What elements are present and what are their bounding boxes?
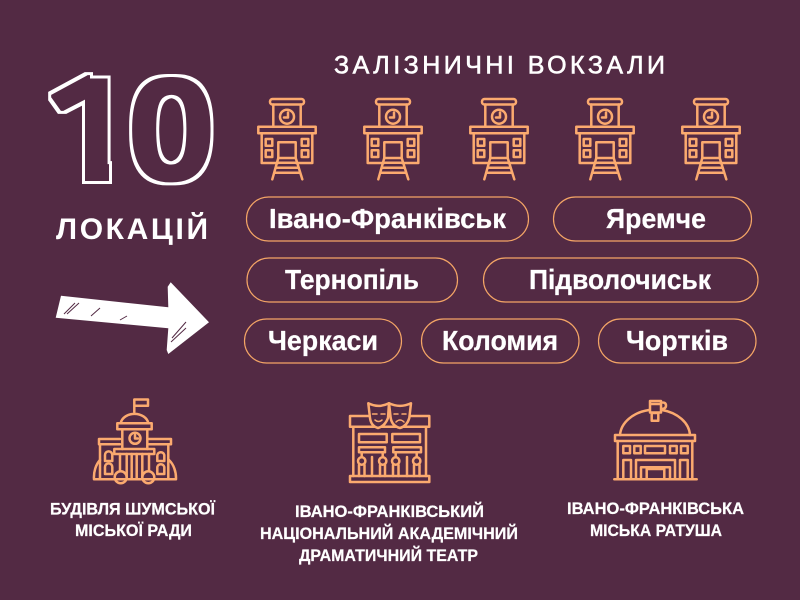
hand-drawn arrow <box>56 282 209 354</box>
big number 10 <box>48 72 214 186</box>
pill: Chortkiv <box>598 319 756 363</box>
icon: railway station 4 <box>576 99 634 179</box>
pill: Ivano-Frankivsk: Івано-Франківськ <box>269 203 507 234</box>
big number 10: 0 <box>127 48 216 211</box>
caption: drama theatre: ІВАНО-ФРАНКІВСЬКИЙ <box>295 502 484 521</box>
pill: Ternopil <box>247 258 458 302</box>
pill: Yaremche <box>554 197 752 241</box>
pill: Kolomyia: Коломия <box>442 325 558 356</box>
caption: city council: БУДІВЛЯ ШУМСЬКОЇ <box>50 500 216 518</box>
title: railway stations: ЗАЛІЗНИЧНІ ВОКЗАЛИ <box>334 52 665 80</box>
icon: railway station 1 <box>258 99 316 179</box>
pill: Cherkasy: Черкаси <box>268 325 378 356</box>
pill: Kolomyia <box>422 319 579 363</box>
label: locations count: ЛОКАЦІЙ <box>56 212 208 246</box>
caption: city hall: ІВАНО-ФРАНКІВСЬКА <box>567 499 744 518</box>
pill: Cherkasy <box>244 319 402 363</box>
icon: city council building <box>94 400 176 483</box>
pill: Yaremche: Яремче <box>606 203 706 234</box>
icon: railway station 2 <box>364 99 422 179</box>
pill: Pidvolochysk <box>484 258 758 302</box>
pill: Chortkiv: Чортків <box>626 325 728 356</box>
big number 10: 1 <box>47 48 136 211</box>
caption: drama theatre <box>260 502 518 565</box>
icon: drama theatre <box>350 403 429 482</box>
caption: city council: МІСЬКОЇ РАДИ <box>75 521 192 540</box>
pill: Pidvolochysk: Підволочиськ <box>529 264 712 295</box>
icon: railway station 5 <box>682 99 740 179</box>
icon: city hall <box>614 401 697 479</box>
pill: Ivano-Frankivsk <box>246 197 528 241</box>
caption: city hall <box>567 499 744 540</box>
caption: drama theatre: ДРАМАТИЧНИЙ ТЕАТР <box>299 546 478 565</box>
icon: railway station 3 <box>470 99 528 179</box>
caption: city hall: МІСЬКА РАТУША <box>590 521 722 540</box>
caption: drama theatre: НАЦІОНАЛЬНИЙ АКАДЕМІЧНИЙ <box>260 524 518 543</box>
pill: Ternopil: Тернопіль <box>285 264 419 295</box>
caption: city council <box>50 500 216 540</box>
